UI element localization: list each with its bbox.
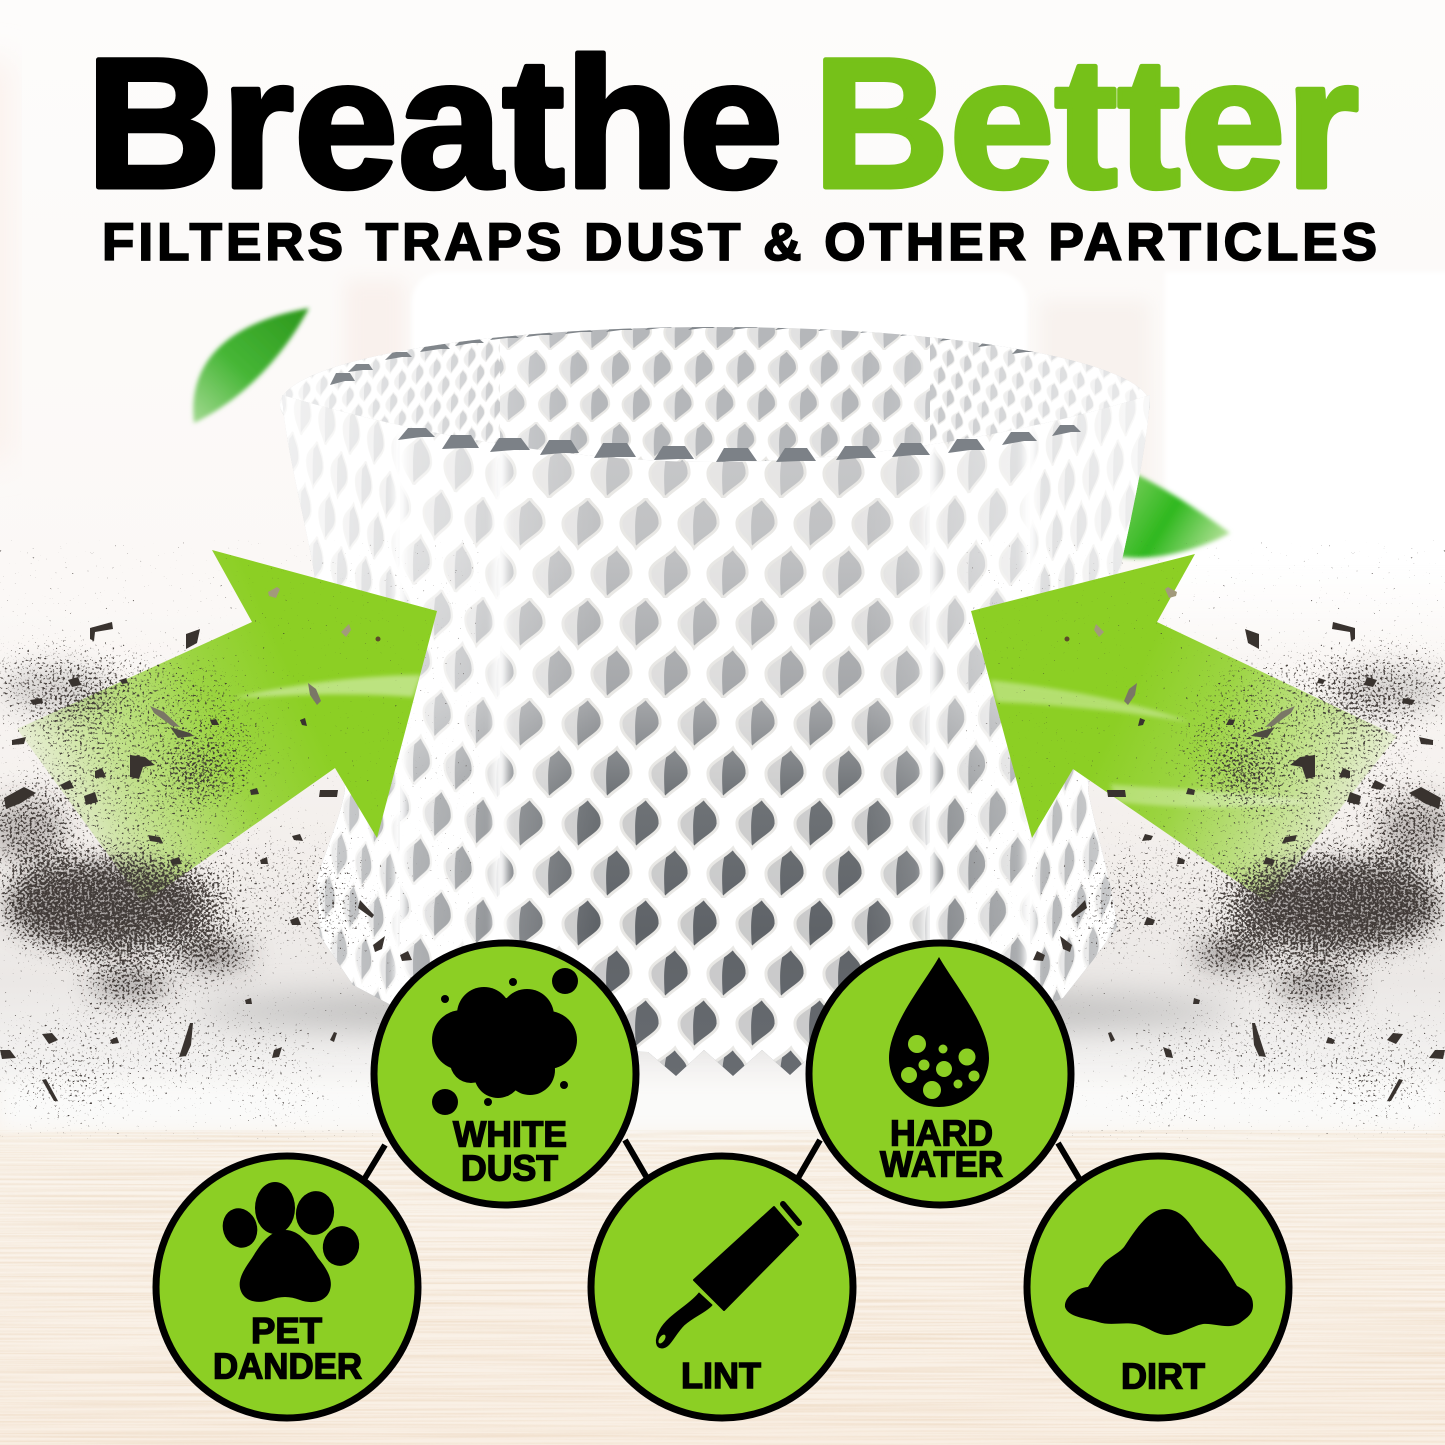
label: hard water: HARD — [890, 1112, 993, 1154]
arrow: right green arrow — [971, 554, 1397, 902]
dust cloud: left — [0, 587, 412, 1115]
label: pet dander: PET — [251, 1310, 322, 1351]
label: white dust — [453, 1114, 567, 1188]
wood floor — [0, 1136, 1445, 1445]
label: pet dander — [213, 1310, 362, 1386]
subtitle: FILTERS TRAPS DUST & OTHER PARTICLES — [102, 213, 1377, 272]
badge: white dust — [374, 943, 636, 1205]
label: lint: LINT — [681, 1355, 761, 1396]
icon: lint roller — [656, 1204, 799, 1348]
label: pet dander: DANDER — [213, 1346, 362, 1386]
back rim — [280, 327, 1150, 462]
leaf top left — [193, 308, 309, 423]
title: Breathe — [86, 21, 783, 227]
label: hard water: WATER — [880, 1144, 1003, 1184]
label: hard water — [880, 1112, 1003, 1184]
icon: paw print — [218, 1182, 364, 1302]
label: white dust: WHITE — [453, 1114, 567, 1154]
title: Better — [813, 21, 1359, 227]
icon: dirt pile — [1065, 1209, 1253, 1335]
icon: water drop — [889, 957, 989, 1107]
front mesh body — [275, 385, 1155, 1085]
leaf right — [1116, 468, 1230, 558]
title — [86, 21, 1359, 227]
badge: lint — [591, 1156, 853, 1418]
icon: dust cloud — [432, 968, 578, 1115]
badge: hard water — [809, 943, 1071, 1205]
humidifier wick filter — [275, 320, 1155, 1085]
front rim chips — [398, 425, 1081, 462]
circle connector lines — [365, 1140, 1080, 1180]
label: dirt: DIRT — [1121, 1356, 1205, 1396]
badge: pet dander — [156, 1156, 418, 1418]
arrow: left green arrow — [17, 550, 437, 903]
badge: dirt — [1027, 1156, 1289, 1418]
label: white dust: DUST — [461, 1148, 558, 1188]
dust cloud: right (mirrored) — [1033, 587, 1445, 1115]
